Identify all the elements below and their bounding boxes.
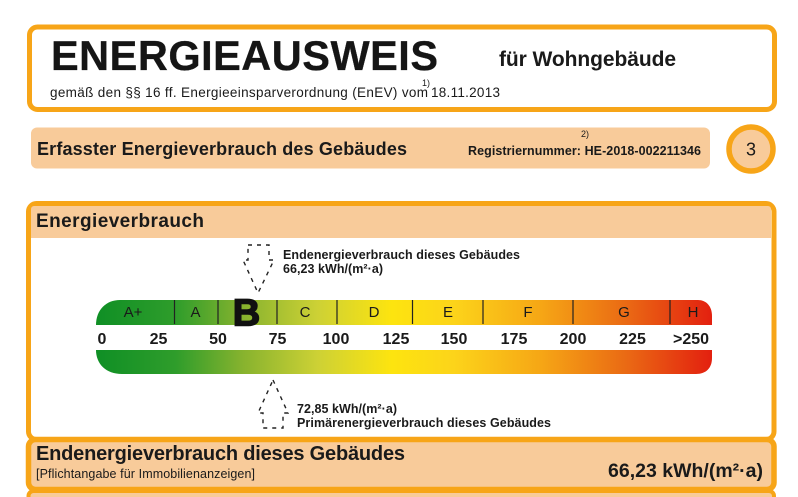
class dividers [174, 300, 670, 324]
panel: Energieverbrauch [28, 204, 774, 440]
panel: Endenergieverbrauch summary [28, 440, 774, 490]
scale numbers: 100 [323, 331, 349, 348]
class letters: E [443, 304, 453, 321]
primary energy label [297, 402, 551, 430]
current class B: B [233, 292, 260, 334]
title: ENERGIEAUSWEIS [51, 32, 438, 79]
gradient bar [96, 350, 712, 374]
class letters: D [369, 304, 380, 321]
scale numbers: 150 [441, 331, 467, 348]
primary energy marker arrow [258, 380, 288, 428]
footnote marker 1: 1) [422, 78, 430, 88]
scale numbers: >250 [673, 331, 709, 348]
class letters: H [688, 304, 698, 321]
final energy label: Endenergieverbrauch dieses Gebäudes [283, 248, 520, 262]
primary energy label: 72,85 kWh/(m²·a) [297, 402, 397, 416]
page number badge: 3 [746, 140, 756, 160]
mandatory note: [Pflichtangabe für Immobilienanzeigen] [36, 467, 255, 481]
class letters: A+ [124, 304, 143, 321]
class letters: A [190, 304, 201, 321]
class letters [124, 304, 698, 321]
panel heading: Energieverbrauch [36, 211, 204, 232]
scale numbers: 225 [619, 331, 646, 348]
scale numbers: 175 [501, 331, 527, 348]
section heading: Erfasster Energieverbrauch des Gebäudes [37, 139, 407, 159]
primary energy label: Primärenergieverbrauch dieses Gebäudes [297, 416, 551, 430]
energy class scale bar [96, 292, 712, 334]
scale numbers: 125 [383, 331, 409, 348]
class letters: G [618, 304, 630, 321]
title panel [30, 27, 774, 110]
scale numbers: 50 [209, 331, 227, 348]
scale numbers: 25 [150, 331, 168, 348]
panel header band [31, 206, 771, 238]
scale numbers: 0 [98, 331, 107, 348]
summary heading: Endenergieverbrauch dieses Gebäudes [36, 443, 405, 465]
final energy label: 66,23 kWh/(m²·a) [283, 262, 383, 276]
legal date: 18.11.2013 [431, 85, 500, 100]
next panel top edge [28, 491, 774, 497]
subtitle: für Wohngebäude [499, 48, 676, 71]
summary value: 66,23 kWh/(m²·a) [608, 460, 763, 482]
scale numbers: 200 [560, 331, 586, 348]
page number badge [729, 127, 773, 171]
scale numbers [98, 331, 709, 348]
legal reference: gemäß den §§ 16 ff. Energieeinsparverordnung (EnEV) vom [50, 85, 428, 100]
final energy label [283, 248, 520, 276]
footnote marker 2: 2) [581, 129, 589, 139]
class letters: C [300, 304, 311, 321]
final energy marker arrow [243, 245, 274, 293]
scale numbers: 75 [269, 331, 286, 348]
registration number: Registriernummer: HE-2018-002211346 [468, 144, 701, 158]
class letters: F [523, 304, 533, 321]
section header bar [31, 128, 710, 168]
